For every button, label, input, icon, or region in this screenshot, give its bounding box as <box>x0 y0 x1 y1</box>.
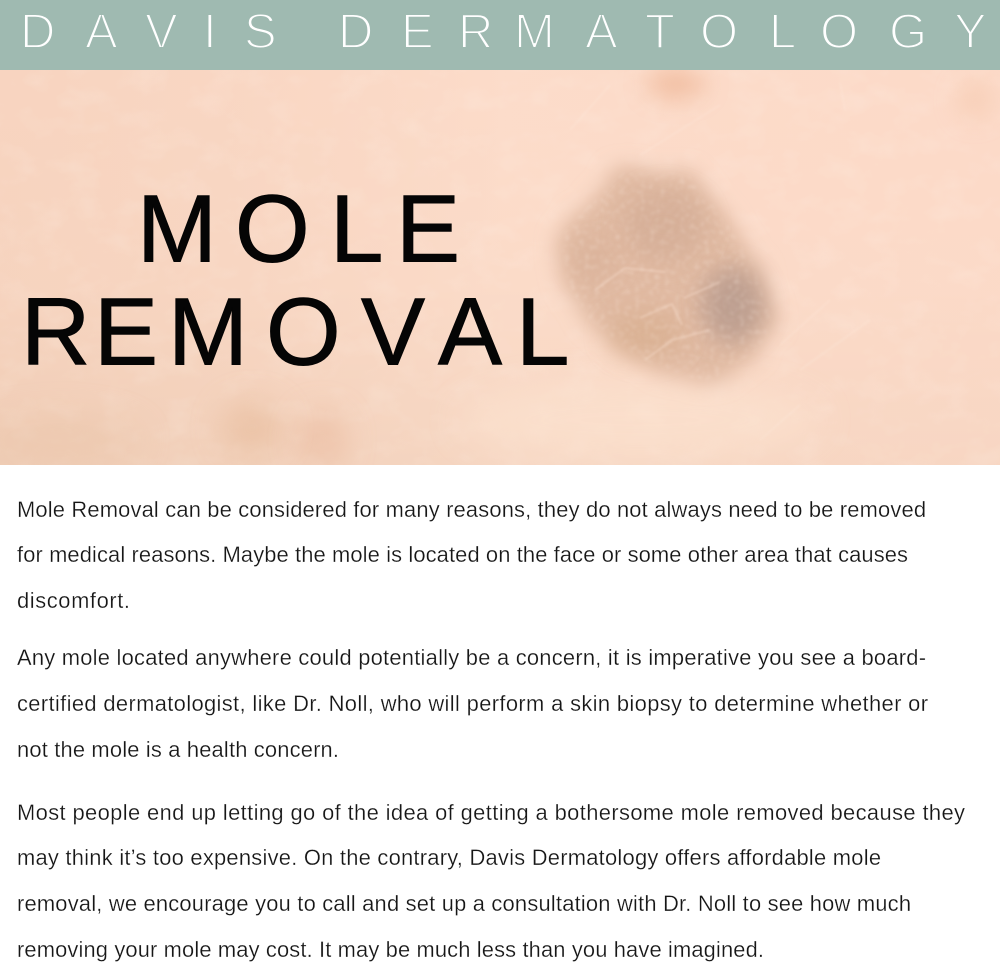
paragraph 1 <box>17 497 926 613</box>
title: mole removal <box>21 176 569 386</box>
paragraph 3: removal, we encourage you to call and set up a consultation with Dr. Noll to see how much <box>17 891 911 916</box>
paragraph 1: for medical reasons. Maybe the mole is located on the face or some other area that causes <box>17 542 908 567</box>
skin hairs <box>570 82 870 440</box>
paragraph 3: Most people end up letting go of the idea of getting a bothersome mole removed because they <box>17 800 965 825</box>
paragraph 2: Any mole located anywhere could potentially be a concern, it is imperative you see a board- <box>17 645 926 670</box>
paragraph 1: Mole Removal can be considered for many reasons, they do not always need to be removed <box>17 497 926 522</box>
paragraph 3: may think it’s too expensive. On the contrary, Davis Dermatology offers affordable mole <box>17 845 881 870</box>
paragraph 2: not the mole is a health concern. <box>17 737 339 762</box>
title line 2: REMOVAL <box>21 278 569 386</box>
paragraph 1: discomfort. <box>17 588 130 613</box>
skin spots <box>0 69 993 468</box>
paragraph 3: removing your mole may cost. It may be much less than you have imagined. <box>17 937 764 962</box>
brand name: DAVIS DERMATOLOGY <box>20 5 987 59</box>
body copy <box>17 497 965 962</box>
paragraph 2 <box>17 645 928 762</box>
header band <box>0 0 1000 70</box>
mole <box>556 168 778 388</box>
hero photo: skin with mole <box>0 69 1000 468</box>
title line 1: MOLE <box>137 176 460 282</box>
paragraph 3 <box>17 800 965 962</box>
paragraph 2: certified dermatologist, like Dr. Noll, who will perform a skin biopsy to determine whether or <box>17 691 928 716</box>
